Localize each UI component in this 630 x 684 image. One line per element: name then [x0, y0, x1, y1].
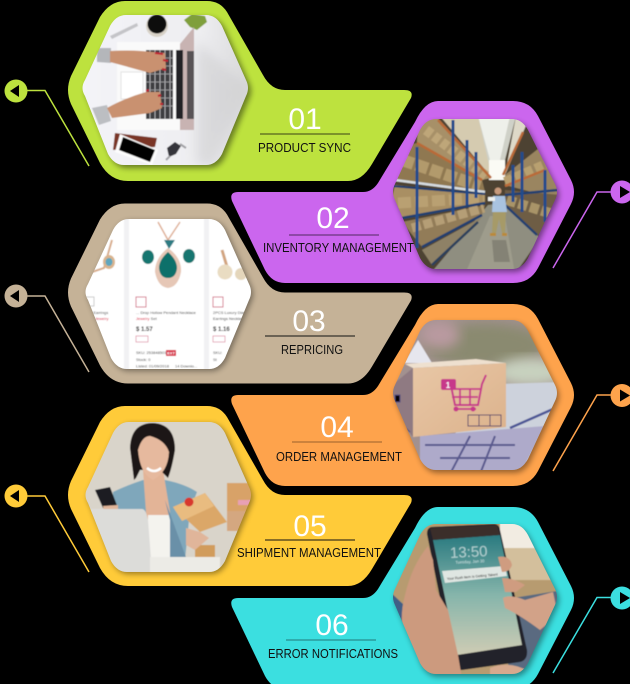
- panel: 02 inventory management: [231, 101, 574, 283]
- panel: 05 shipment management: [68, 406, 412, 586]
- image: jewelry product listing: St: [213, 357, 218, 362]
- panel: 01 product sync: [68, 1, 412, 181]
- image: parcel with shopping cart on keyboard: [388, 316, 565, 474]
- connector: 01: [4, 80, 89, 166]
- image: jewelry product listing: $ 1.57: [136, 327, 153, 333]
- number 04: 04: [320, 411, 354, 444]
- image: jewelry product listing: $ 1.16: [213, 327, 230, 333]
- image: jewelry product listing: EXT: [167, 350, 175, 356]
- label: error notifications: ERROR NOTIFICATIONS: [268, 646, 398, 661]
- image: hand holding phone with notification: 13:50: [450, 543, 488, 562]
- image: parcel with shopping cart on keyboard: 1: [446, 381, 451, 390]
- number 02: 02: [316, 202, 350, 235]
- panel: 04 order management: [231, 304, 574, 486]
- image: warehouse aisle: [388, 116, 563, 274]
- label: product sync: PRODUCT SYNC: [258, 140, 351, 155]
- connector: 03: [4, 284, 89, 372]
- image: hand holding phone with notification: Tuesday, Jan 30: [455, 558, 485, 565]
- connector: 02: [553, 180, 630, 268]
- image: hand holding phone with notification: [388, 520, 563, 678]
- image: hands typing on laptop: [78, 12, 253, 168]
- image: hand holding phone with notification: Your Rush Item Is Getting Taken!: [447, 573, 498, 581]
- connector: 06: [553, 586, 630, 673]
- image: jewelry product listing: SKU: 253848501: [136, 350, 167, 355]
- image: jewelry product listing: 2PCS Luxury Diamond: [213, 310, 254, 315]
- image: woman holding parcel and phone: [80, 418, 257, 576]
- number 03: 03: [292, 305, 326, 338]
- image: jewelry product listing: stal Earrings: [86, 310, 108, 315]
- label: repricing: REPRICING: [281, 342, 343, 357]
- image: jewelry product listing: Stock: 0: [136, 357, 151, 362]
- image: jewelry product listing: [80, 216, 256, 374]
- image: jewelry product listing: Jewelry: [95, 316, 109, 321]
- connector: 05: [4, 484, 89, 572]
- panel: 06 error notifications: [231, 507, 574, 684]
- number 06: 06: [315, 609, 349, 642]
- label: shipment management: SHIPMENT MANAGEMENT: [237, 545, 381, 560]
- image: jewelry product listing: SKU:: [213, 350, 222, 355]
- panel: 03 repricing: [68, 204, 412, 384]
- number 05: 05: [293, 510, 327, 543]
- number 01: 01: [288, 103, 322, 136]
- image: jewelry product listing: Listed: 01/09/2018: [136, 364, 170, 368]
- image: jewelry product listing: ... Drop Hollow Pendant Necklace: [136, 310, 197, 315]
- connector: 04: [553, 384, 630, 471]
- label: inventory management: INVENTORY MANAGEMENT: [263, 240, 414, 255]
- image: jewelry product listing: Jewelry Set: [136, 316, 158, 321]
- label: order management: ORDER MANAGEMENT: [276, 449, 402, 464]
- image: jewelry product listing: Earrings Necklace: [213, 316, 246, 321]
- image: jewelry product listing: 14 Downlo...: [175, 364, 197, 368]
